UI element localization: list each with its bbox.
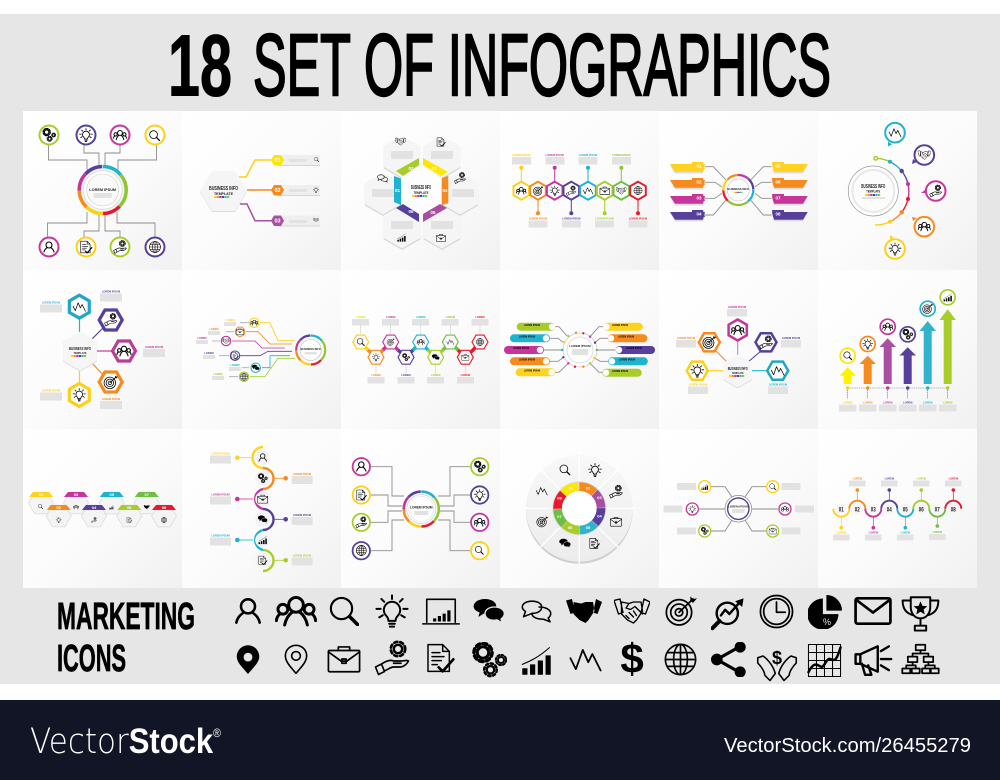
hexagons [28,492,176,527]
labels: LOREM IPSUM [629,216,647,220]
centre label [401,165,442,214]
labels: LOREM IPSUM [782,336,800,340]
numbered discs: 08 [951,508,956,514]
labels: LOREM [885,476,894,480]
title: 18 [168,18,232,114]
panel: business info hexagon with three tabs: TEMPLATE [214,192,234,196]
labels: LOREM IPSUM [211,452,230,456]
numbered bands: 06 [408,209,414,214]
right pills: LOREM IPSUM [626,348,642,350]
left ribbons [670,162,705,222]
small icons [38,504,167,523]
central ring [722,174,754,206]
coloured hexagons [69,295,136,406]
left ribbons: 02 [696,180,702,184]
labels: LOREM IPSUM [677,336,695,340]
coloured caps [29,492,176,510]
labels: LOREM IPSUM [211,492,230,496]
labels: LOREM IPSUM [546,153,564,157]
segment numbers: 04 [597,514,602,518]
nodes [221,318,260,381]
coloured caps: 02 [56,505,62,510]
labels: LOREM [401,373,411,377]
labels: LOREM IPSUM [293,513,311,517]
coloured caps: 01 [39,492,44,497]
satellite icons [40,126,164,256]
segment numbers [557,486,602,530]
labels [839,400,956,412]
labels: LOREM IPSUM [293,472,311,476]
right pills: LOREM IPSUM [619,360,635,362]
central hexagon [63,332,97,372]
heading: marketing icons [57,595,195,679]
numbered bands: 03 [431,166,437,171]
labels: LOREM IPSUM [769,382,787,386]
segment numbers: 02 [586,486,591,490]
right ribbons: 08 [775,212,781,216]
labels: LOREM [197,336,207,340]
panel: segmented wheel [500,429,659,588]
tab bars: 03 [274,219,281,225]
labels: LOREM IPSUM [562,216,580,220]
bubbles [885,123,946,259]
panel: hexagon fan [659,270,818,429]
central circle [725,495,752,522]
coloured caps: 03 [74,492,79,497]
wheel body [524,452,635,564]
petal text blocks and icons [372,138,474,242]
central hexagon: TEMPLATE [732,371,744,375]
central hexagon: BUSINESS INFO [69,346,91,351]
labels: LOREM [853,476,862,480]
labels: LOREM IPSUM [728,305,746,309]
left pills: LOREM IPSUM [524,370,540,372]
footer logo: ® [213,726,221,740]
arrows [840,309,956,384]
labels: LOREM [371,373,381,377]
labels: LOREM [869,530,878,534]
tab bars [271,155,320,226]
stems [841,490,953,527]
labels: LOREM IPSUM [211,534,230,538]
dots [840,488,955,530]
left ribbons: 03 [696,196,702,200]
right pills [602,323,655,377]
centre label: BUSINESS INFO [411,185,431,191]
icon circles [840,290,955,363]
numbered discs [836,503,959,514]
stems and dots [519,166,640,215]
central ring: BUSINESS INFO [727,187,750,191]
nodes [353,458,488,559]
panel: zigzag hexagon chain [341,270,500,429]
left pills: LOREM IPSUM [519,336,535,338]
left pills [504,323,555,376]
hexagons [514,182,646,200]
labels: LOREM IPSUM [612,153,630,157]
central circle: TEMPLATE [866,190,881,194]
labels: LOREM [230,363,240,367]
central ring: LOREM IPSUM [410,506,433,510]
connector lines [239,160,272,221]
heading: marketing icons: ICONS [57,637,126,679]
segment numbers: 07 [557,514,562,519]
numbered bands: 01 [395,188,400,193]
icon row 2: $ [772,648,782,668]
labels: LOREM [386,315,395,319]
footer bar [0,700,1000,780]
labels: LOREM [883,400,892,404]
panel: ring with eight ribbons [659,111,818,270]
tab bars: 02 [274,188,281,194]
central hexagon [723,354,752,388]
labels: LOREM [416,315,425,319]
right pills: LOREM IPSUM [612,325,628,327]
labels: LOREM [949,476,958,480]
footer logo: VectorStock [30,722,224,762]
labels: LOREM IPSUM [596,216,614,220]
panel: capped hexagon row [23,429,182,588]
numbered bands: 02 [408,166,414,171]
labels: LOREM [446,315,455,319]
panel: hexagon chain timeline [500,111,659,270]
numbered discs: 03 [871,508,876,514]
panel: circuit lines into ring [182,270,341,429]
ring [296,336,325,364]
labels [210,452,313,566]
coloured caps: 04 [92,505,97,510]
labels: LOREM [843,400,852,404]
labels: LOREM IPSUM [512,153,530,157]
icon row 2: $ [620,635,644,682]
central circle: BUSINESS INFO [861,184,885,190]
central circle: LOREM IPSUM [728,504,749,508]
central ring [402,490,440,528]
numbered bands: 05 [430,210,436,215]
labels: LOREM [933,530,942,534]
numbered discs: 01 [839,508,844,514]
icon row 1 [236,595,938,631]
label blocks [664,483,814,534]
labels: LOREM [204,351,214,355]
coloured caps: 05 [109,492,115,497]
zigzag connector [361,342,480,357]
numbered discs: 05 [903,508,908,514]
segment numbers: 01 [569,486,574,490]
labels [512,153,648,228]
labels: LOREM [225,318,235,322]
coloured ring [558,487,601,530]
coloured arc [874,156,910,225]
hexagons [687,320,788,380]
icon row 1: % [823,617,831,627]
serpentine [252,447,274,571]
numbered discs: 04 [887,508,892,514]
panel: circle with eight satellites [23,111,182,270]
connectors [80,315,112,386]
title [168,17,831,114]
right pills: LOREM IPSUM [612,371,628,373]
segment numbers: 05 [586,525,591,530]
panel: circle with side nodes [341,429,500,588]
numbered discs: 07 [935,508,940,514]
right pills: LOREM IPSUM [618,336,634,338]
labels: LOREM [903,400,912,404]
coloured caps: 07 [144,492,150,497]
central circle [848,166,898,216]
hexagons [353,335,488,364]
footer url: VectorStock.com/26455279 [724,735,971,757]
wave [833,501,961,517]
right ribbons: 07 [775,196,781,200]
heading: marketing icons: MARKETING [57,595,195,637]
labels: LOREM [475,315,485,319]
panel: arc of speech bubbles [818,111,977,270]
labels: LOREM [213,372,223,376]
central disc with dots: LOREM IPSUM [569,344,591,348]
numbered bands: 04 [442,188,448,193]
panel: business info hexagon with three tabs [182,111,341,270]
labels: LOREM IPSUM [689,382,707,386]
labels: LOREM IPSUM [42,388,60,392]
labels: LOREM IPSUM [293,554,311,558]
panel: ring with ten pills [500,270,659,429]
icon row 2 [237,635,939,682]
segment numbers: 06 [568,525,573,530]
labels: LOREM [923,400,932,404]
left pills: LOREM IPSUM [524,325,540,327]
tab bars: 01 [274,158,281,164]
labels: LOREM IPSUM [579,153,597,157]
coloured caps: 06 [127,505,132,510]
labels: LOREM [943,400,952,404]
icon discs [255,450,270,568]
labels: LOREM IPSUM [145,345,163,349]
right ribbons: 06 [775,180,781,184]
panel: six hexagon petals [341,111,500,270]
circuit lines [212,323,295,377]
hub [562,491,597,526]
labels: LOREM IPSUM [529,216,547,220]
labels: LOREM [863,400,872,404]
segment numbers: 08 [557,496,562,500]
labels: LOREM [901,530,910,534]
labels: LOREM IPSUM [102,290,120,294]
numbered bands [394,158,448,222]
numbered discs: 02 [855,508,860,514]
labels: LOREM [209,327,219,331]
panel: business info hexagon with three tabs: BUSINESS INFO [209,186,238,192]
labels: LOREM IPSUM [42,300,60,304]
labels: LOREM [837,530,846,534]
central hexagon: BUSINESS INFO [728,366,748,371]
labels [40,290,165,409]
labels [196,318,241,380]
right ribbons [772,162,808,222]
panel: serpentine timeline [182,429,341,588]
labels: LOREM [431,373,440,377]
labels: LOREM [356,315,365,319]
panel: compact hub with six nodes [659,429,818,588]
labels [352,315,488,384]
dots and stems [235,455,288,563]
panel: wave timeline [818,429,977,588]
panel: rising arrows chart [818,270,977,429]
ring: BUSINESS INFO [301,347,321,351]
stems [361,320,480,374]
timeline [846,386,949,399]
labels [676,305,801,394]
wheel icons [536,464,622,548]
numbered discs: 06 [919,508,924,514]
labels [833,476,962,540]
panel: hexagon with five petals [23,270,182,429]
labels: LOREM [917,476,926,480]
right ribbons: 05 [775,164,781,168]
central disc with dots [561,332,598,368]
labels: LOREM IPSUM [102,397,120,401]
central ring [79,166,127,214]
segment numbers: 03 [597,495,602,500]
nodes [686,481,791,537]
left ribbons: 01 [696,164,702,168]
labels: LOREM [461,373,470,377]
central ring: LOREM IPSUM [89,188,116,192]
left ribbons: 04 [696,212,702,216]
centre label: TEMPLATE [414,191,429,195]
central hexagon: TEMPLATE [74,351,86,355]
coloured caps: 08 [162,505,167,510]
left pills: LOREM IPSUM [513,348,529,350]
left pills: LOREM IPSUM [519,360,535,362]
